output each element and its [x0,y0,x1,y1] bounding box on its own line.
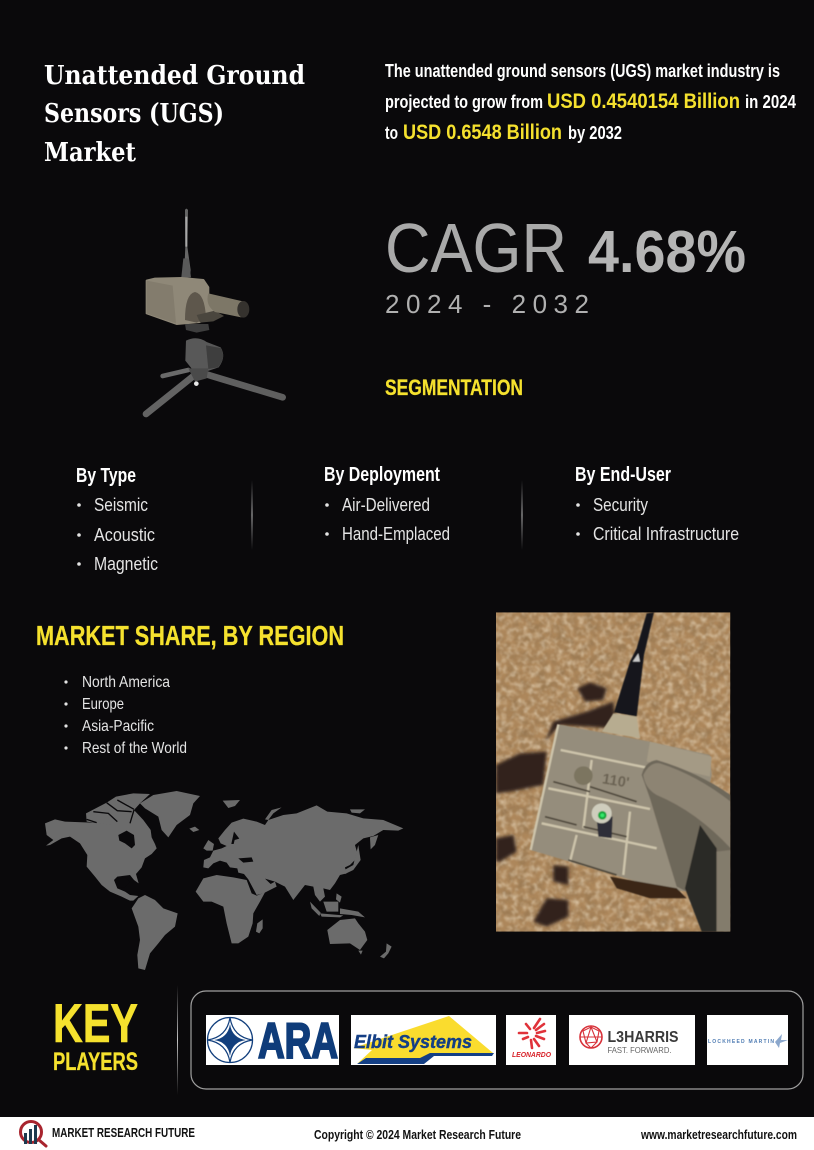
segment list: by type: Magnetic [94,554,158,574]
intro text: market projection: in 2024 [745,92,796,112]
segment list: by deployment: By Deployment [324,464,440,486]
world map [45,791,403,970]
segment list: by end-user: By End-User [575,464,671,486]
CAGR figure [385,209,746,319]
segment list: by end-user: Security [593,495,648,515]
photo: buried sensor held by gloved hand: 110' [601,771,630,792]
footer bar: MARKET RESEARCH FUTURE [52,1125,195,1140]
heading: key players [53,992,138,1076]
logo: Lockheed Martin [707,1015,788,1065]
intro text: market projection: projected to grow from [385,92,543,112]
title [44,61,305,168]
CAGR figure: 2024 - 2032 [385,289,589,319]
logo: L3Harris: L3HARRIS [608,1029,679,1046]
logo: L3Harris: FAST. FORWARD. [608,1045,672,1055]
logo: ARA: ARA [258,1013,338,1069]
region list: Asia-Pacific [82,718,154,735]
segment list: by type: Acoustic [94,525,155,545]
logo: Elbit Systems: Elbit Systems [354,1032,472,1052]
logo: Leonardo: LEONARDO [512,1052,552,1059]
CAGR figure: 4.68% [588,219,746,285]
title: Sensors (UGS) [44,99,224,129]
heading: market share by region: MARKET SHARE, BY REGION [36,620,344,651]
logo: ARA [206,1013,339,1069]
segment list: by deployment: Hand-Emplaced [342,524,450,544]
intro text: market projection: USD 0.6548 Billion [403,121,562,144]
panel: key player logos [191,991,803,1089]
segment list: by type: By Type [76,465,136,487]
footer bar: Copyright © 2024 Market Research Future [314,1127,521,1142]
intro text: market projection: by 2032 [568,123,622,143]
logo: Lockheed Martin: LOCKHEED MARTIN [708,1039,774,1045]
heading: segmentation: SEGMENTATION [385,375,523,400]
heading: key players: KEY [53,992,138,1054]
title: Market [44,138,136,168]
intro text: market projection: USD 0.4540154 Billion [547,90,740,113]
heading: key players: PLAYERS [53,1048,138,1076]
segment list: by type: Seismic [94,495,148,515]
logo: Leonardo [506,1015,556,1065]
region list: Rest of the World [82,740,187,757]
intro text: market projection: to [385,123,398,143]
segment list: by type [76,465,158,574]
region list: Europe [82,696,124,713]
region list [64,674,187,757]
icon: tripod sensor [146,209,283,414]
CAGR figure: CAGR [385,209,567,287]
photo: buried sensor held by gloved hand [496,612,731,932]
icon: Market Research Future logo [20,1122,46,1146]
intro text: market projection [385,61,796,144]
logo: Elbit Systems [351,1015,496,1065]
footer bar [0,1117,814,1150]
segment list: by end-user: Critical Infrastructure [593,524,739,544]
logo: L3Harris [569,1015,695,1065]
segment list: by deployment: Air-Delivered [342,495,430,515]
title: Unattended Ground [44,61,305,91]
segment list: by deployment [324,464,450,544]
region list: North America [82,674,170,691]
segment list: by end-user [575,464,739,544]
